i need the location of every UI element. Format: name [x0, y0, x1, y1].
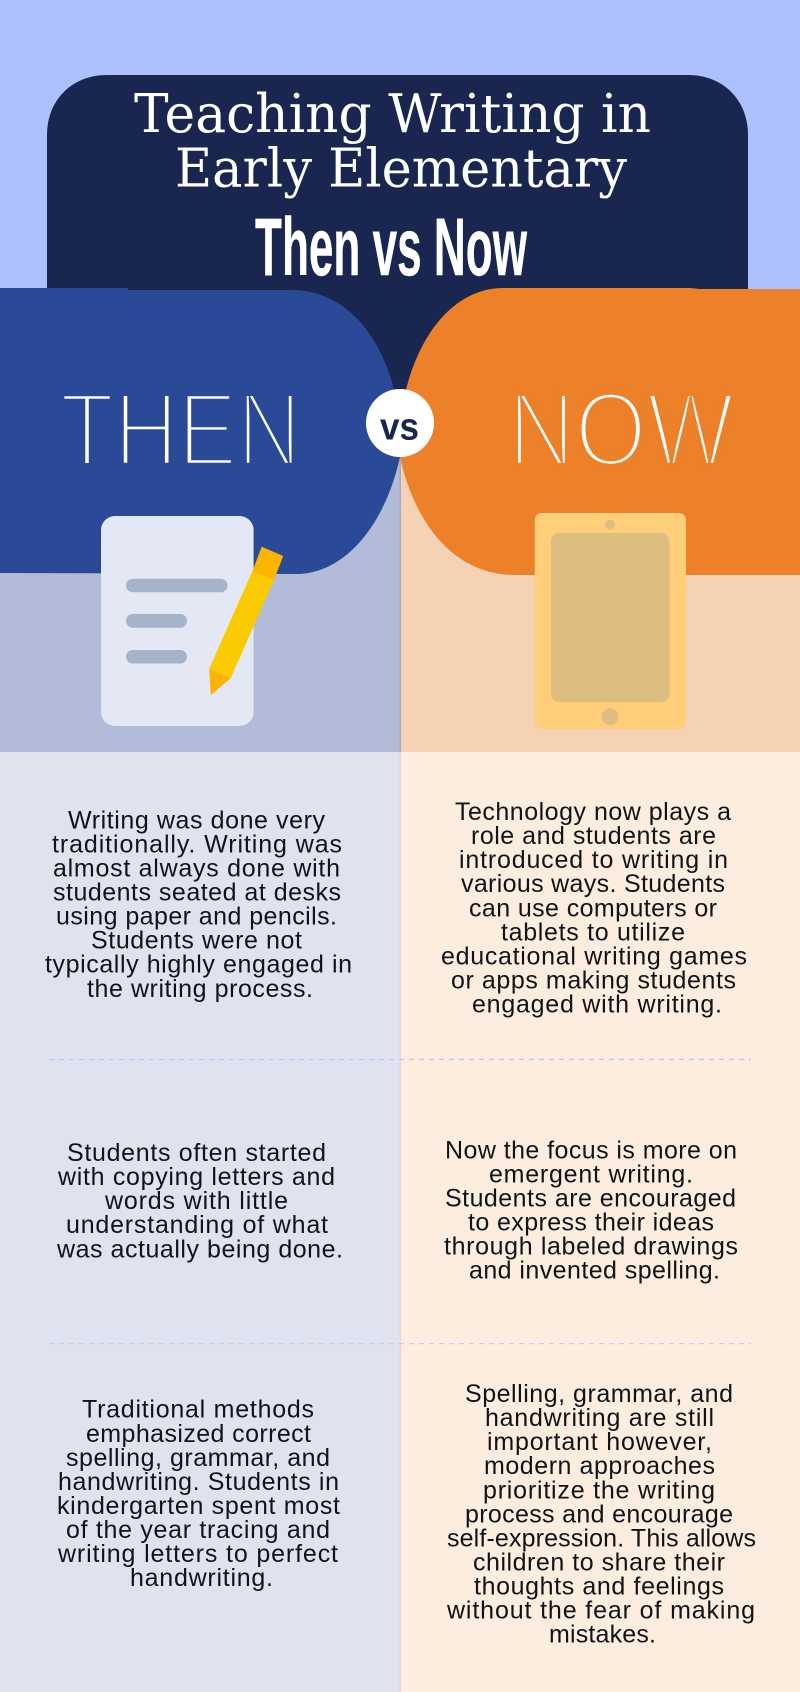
text: now row 1: engaged with writing. [472, 990, 722, 1018]
text: now row 3: important however, [487, 1428, 712, 1456]
text: then row 1 [45, 806, 352, 1003]
panel: then text column [0, 752, 400, 1692]
text: then row 1: using paper and pencils. [56, 903, 337, 931]
panel: now illustration band [400, 440, 800, 752]
text: now row 1: Technology now plays a [455, 798, 731, 826]
text: now row 1: various ways. Students [461, 870, 725, 898]
text: now row 3: process and encourage [465, 1500, 733, 1528]
text: now row 2: through labeled drawings [444, 1233, 738, 1261]
text: then row 3: Traditional methods [82, 1396, 314, 1424]
text: then row 2: was actually being done. [56, 1235, 343, 1263]
text: now row 1: educational writing games [441, 942, 747, 970]
title: then vs now: Then vs Now [255, 202, 527, 293]
text: then row 1: traditionally. Writing was [52, 830, 342, 858]
icon: tablet [535, 513, 686, 729]
vs badge [366, 389, 434, 457]
text: then row 2: words with little [104, 1187, 288, 1215]
text: now row 2: and invented spelling. [469, 1257, 720, 1285]
text: now row 1: tablets to utilize [501, 918, 685, 946]
text: now row 2: to express their ideas [468, 1208, 714, 1236]
text: now row 3 [446, 1380, 756, 1649]
text: then row 3: handwriting. Students in [58, 1468, 339, 1496]
text: then row 3 [57, 1396, 340, 1592]
title: main heading [134, 84, 651, 200]
heading: then: THEN [60, 372, 301, 488]
text: now row 2 [444, 1136, 738, 1285]
panel: now orange header shape [400, 288, 800, 575]
text: now row 1 [441, 798, 747, 1018]
text: then row 2: understanding of what [66, 1211, 328, 1239]
text: now row 2: Students are encouraged [445, 1184, 736, 1212]
text: now row 1: or apps making students [451, 966, 736, 994]
text: then row 3: emphasized correct [86, 1420, 311, 1448]
text: then row 1: Writing was done very [68, 806, 326, 834]
text: then row 3: spelling, grammar, and [66, 1444, 330, 1472]
text: then row 2: Students often started [67, 1139, 326, 1167]
text: then row 1: the writing process. [87, 975, 313, 1003]
text: then row 1: typically highly engaged in [45, 951, 352, 979]
vs badge: vs [380, 406, 419, 448]
text: then row 1: students seated at desks [53, 878, 341, 906]
text: now row 1: can use computers or [469, 894, 717, 922]
text: now row 2: emergent writing. [489, 1160, 693, 1188]
text: now row 3: Spelling, grammar, and [465, 1380, 733, 1408]
text: now row 3: mistakes. [549, 1621, 656, 1649]
text: now row 1: introduced to writing in [459, 846, 728, 874]
title: main heading: Teaching Writing in [134, 84, 651, 145]
title: main heading: Early Elementary [175, 139, 627, 200]
text: then row 2 [56, 1139, 343, 1263]
text: then row 2: with copying letters and [57, 1163, 335, 1191]
panel: then blue header shape [0, 288, 400, 574]
text: now row 3: self-expression. This allows [447, 1524, 756, 1552]
title panel [47, 75, 748, 470]
text: then row 3: handwriting. [130, 1564, 273, 1592]
panel: then illustration band [0, 440, 400, 752]
text: now row 3: prioritize the writing [483, 1476, 715, 1504]
text: now row 1: role and students are [471, 822, 716, 850]
text: then row 3: kindergarten spent most [57, 1492, 340, 1520]
text: then row 3: writing letters to perfect [57, 1540, 338, 1568]
icon: paper and pencil [101, 516, 283, 726]
heading: now: NOW [508, 372, 734, 488]
text: now row 3: thoughts and feelings [474, 1572, 724, 1600]
text: now row 2: Now the focus is more on [445, 1136, 737, 1164]
text: now row 3: without the fear of making [446, 1597, 755, 1625]
text: now row 3: handwriting are still [485, 1404, 714, 1432]
text: then row 1: Students were not [91, 927, 302, 955]
text: then row 3: of the year tracing and [66, 1516, 330, 1544]
text: now row 3: modern approaches [484, 1452, 715, 1480]
text: then row 1: almost always done with [53, 854, 340, 882]
panel: now text column [400, 752, 800, 1692]
text: now row 3: children to share their [473, 1548, 725, 1576]
